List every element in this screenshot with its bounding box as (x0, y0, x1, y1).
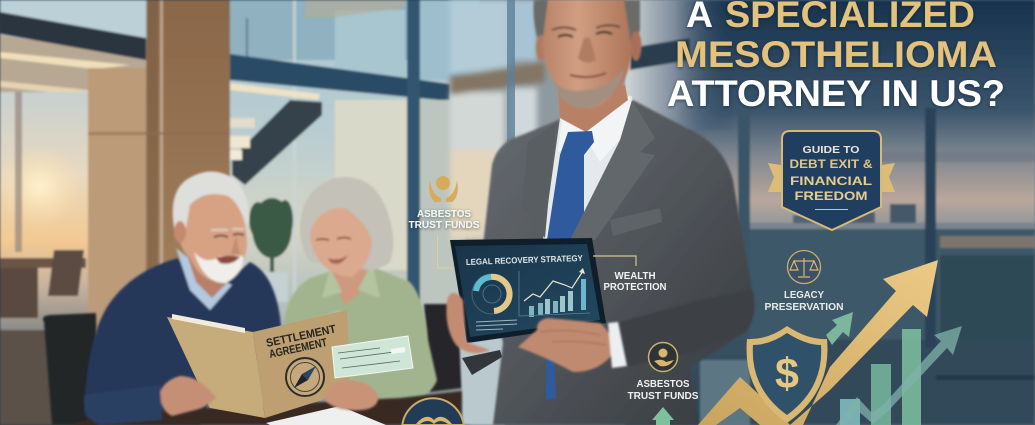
smile (328, 255, 348, 264)
callout: wealth protection: WEALTH (614, 271, 656, 282)
callout: wealth protection: PROTECTION (604, 282, 666, 293)
nose (231, 236, 240, 254)
badge ribbons (768, 163, 787, 192)
stubble beard (552, 68, 624, 108)
sweater (84, 258, 282, 425)
window frame column right (925, 108, 936, 348)
callout: legacy preservation: LEGACY (784, 290, 825, 301)
face (310, 208, 372, 277)
eyes (558, 32, 612, 37)
light strip under beam (230, 83, 320, 100)
lower ceiling light strip (0, 81, 88, 96)
finger shadows (540, 331, 606, 345)
title (667, 0, 1005, 114)
sun glow (0, 145, 82, 229)
shirt (543, 96, 636, 240)
chair behind elderly woman (424, 304, 462, 392)
white beard (194, 252, 243, 283)
icon: hand with heart (648, 342, 678, 372)
hair (300, 177, 393, 270)
small green arrow (826, 312, 853, 345)
badge shield (782, 131, 881, 230)
ceiling light strips (0, 52, 130, 69)
middle window panes behind attorney (450, 0, 545, 240)
necktie (547, 131, 594, 240)
smile (570, 73, 606, 77)
ears (630, 31, 642, 61)
line and bar chart (519, 268, 590, 317)
folder title: SETTLEMENT (265, 323, 337, 350)
callout: asbestos trust funds top: ASBESTOS (417, 209, 472, 220)
shirt collar (558, 95, 632, 162)
attorney hands and cuff (446, 293, 627, 372)
attorney forearm sleeve (620, 290, 754, 367)
connector (593, 256, 636, 266)
folder title line 2: AGREEMENT (268, 337, 328, 361)
callout: legacy preservation: PRESERVATION (764, 302, 844, 313)
sunset window (0, 92, 90, 332)
donut chart (472, 274, 512, 314)
right city background (625, 0, 1035, 425)
callout: asbestos trust funds bottom (628, 342, 699, 402)
teal trend arrow (836, 326, 962, 425)
window mullion (15, 92, 22, 252)
icon: compass (286, 358, 324, 396)
face (177, 194, 247, 282)
callout: asbestos trust funds bottom: ASBESTOS (636, 379, 690, 390)
left ceiling beam (0, 12, 146, 60)
left floor (0, 330, 100, 425)
woman's hand (325, 380, 378, 410)
connector (438, 235, 453, 268)
neck (186, 252, 232, 298)
bank check (332, 336, 413, 378)
elderly man (84, 172, 282, 425)
badge: guide to debt exit and financial freedom: GUIDE TO (802, 144, 860, 156)
tablet: legal recovery strategy (450, 238, 606, 343)
holding hand (518, 318, 613, 372)
left top skylight (0, 0, 150, 40)
grey hair (534, 0, 640, 50)
folder right leaf (253, 310, 350, 418)
badge: guide to debt exit and financial freedom: FINANCIAL (790, 174, 872, 188)
tablet title: LEGAL RECOVERY STRATEGY (466, 253, 583, 267)
shirt cuff (608, 322, 627, 368)
folder left leaf (167, 317, 265, 418)
collar (176, 248, 232, 310)
head (534, 0, 642, 108)
icon: handshake badge (402, 398, 464, 425)
title line 3: ATTORNEY IN US? (667, 72, 1005, 114)
callout: asbestos trust funds top: TRUST FUNDS (408, 220, 480, 231)
gold rising arrow (698, 260, 938, 425)
callout: legacy preservation (764, 250, 844, 313)
callout: wealth protection (593, 256, 666, 293)
collar (322, 262, 380, 298)
right lapel (570, 100, 655, 240)
green blouse (283, 268, 437, 408)
light floor behind table (460, 335, 505, 425)
icon: dollar shield: $ (775, 350, 799, 398)
staircase (232, 100, 322, 185)
background table and chair (0, 258, 86, 268)
wood pillar lower (88, 68, 150, 348)
table (70, 390, 470, 425)
potted plant (249, 198, 293, 273)
blue upper beam (230, 54, 450, 101)
mouth (216, 256, 240, 264)
callout: asbestos trust funds top (408, 176, 480, 268)
folder: settlement agreement (167, 310, 350, 418)
dark blue column (407, 0, 420, 300)
tablet text lines (476, 320, 517, 330)
ear (174, 221, 186, 243)
neck (330, 262, 370, 305)
breast pocket (610, 208, 662, 236)
small green house arrow (652, 407, 674, 425)
callout: asbestos trust funds bottom: TRUST FUNDS (628, 391, 699, 402)
lower tie (546, 355, 556, 400)
left hand (446, 293, 490, 353)
growth bar chart (840, 329, 921, 425)
man's sleeve cuff (84, 385, 162, 425)
man's hand (160, 376, 216, 416)
skyline (890, 204, 916, 274)
icon: scales of justice (788, 250, 820, 284)
nose shadow (578, 38, 596, 63)
badge: guide to debt exit and financial freedom: DEBT EXIT & (790, 159, 872, 171)
hands on folder (84, 376, 378, 425)
chair behind elderly man (43, 313, 98, 425)
elderly woman (283, 177, 437, 408)
glass wall (230, 0, 460, 330)
suit body (483, 100, 754, 425)
attorney (462, 0, 754, 425)
left arm sleeve (462, 350, 502, 375)
badge: guide to debt exit and financial freedom (768, 131, 895, 230)
hair (173, 172, 249, 238)
white papers (266, 406, 386, 425)
wood pillar upper (147, 0, 230, 350)
icon: dollar shield (746, 326, 828, 423)
neck (558, 85, 628, 132)
eyes (316, 238, 351, 240)
title line 2: MESOTHELIOMA (675, 33, 997, 75)
right blurred beam (630, 38, 690, 70)
horizon clouds (880, 152, 1035, 162)
left ceiling (0, 35, 147, 100)
left lapel (522, 122, 557, 238)
eyes (214, 234, 244, 237)
icon: hands with coin (429, 176, 458, 202)
window frame column left (738, 108, 750, 328)
badge: guide to debt exit and financial freedom: FREEDOM (794, 191, 868, 203)
face (542, 0, 632, 108)
